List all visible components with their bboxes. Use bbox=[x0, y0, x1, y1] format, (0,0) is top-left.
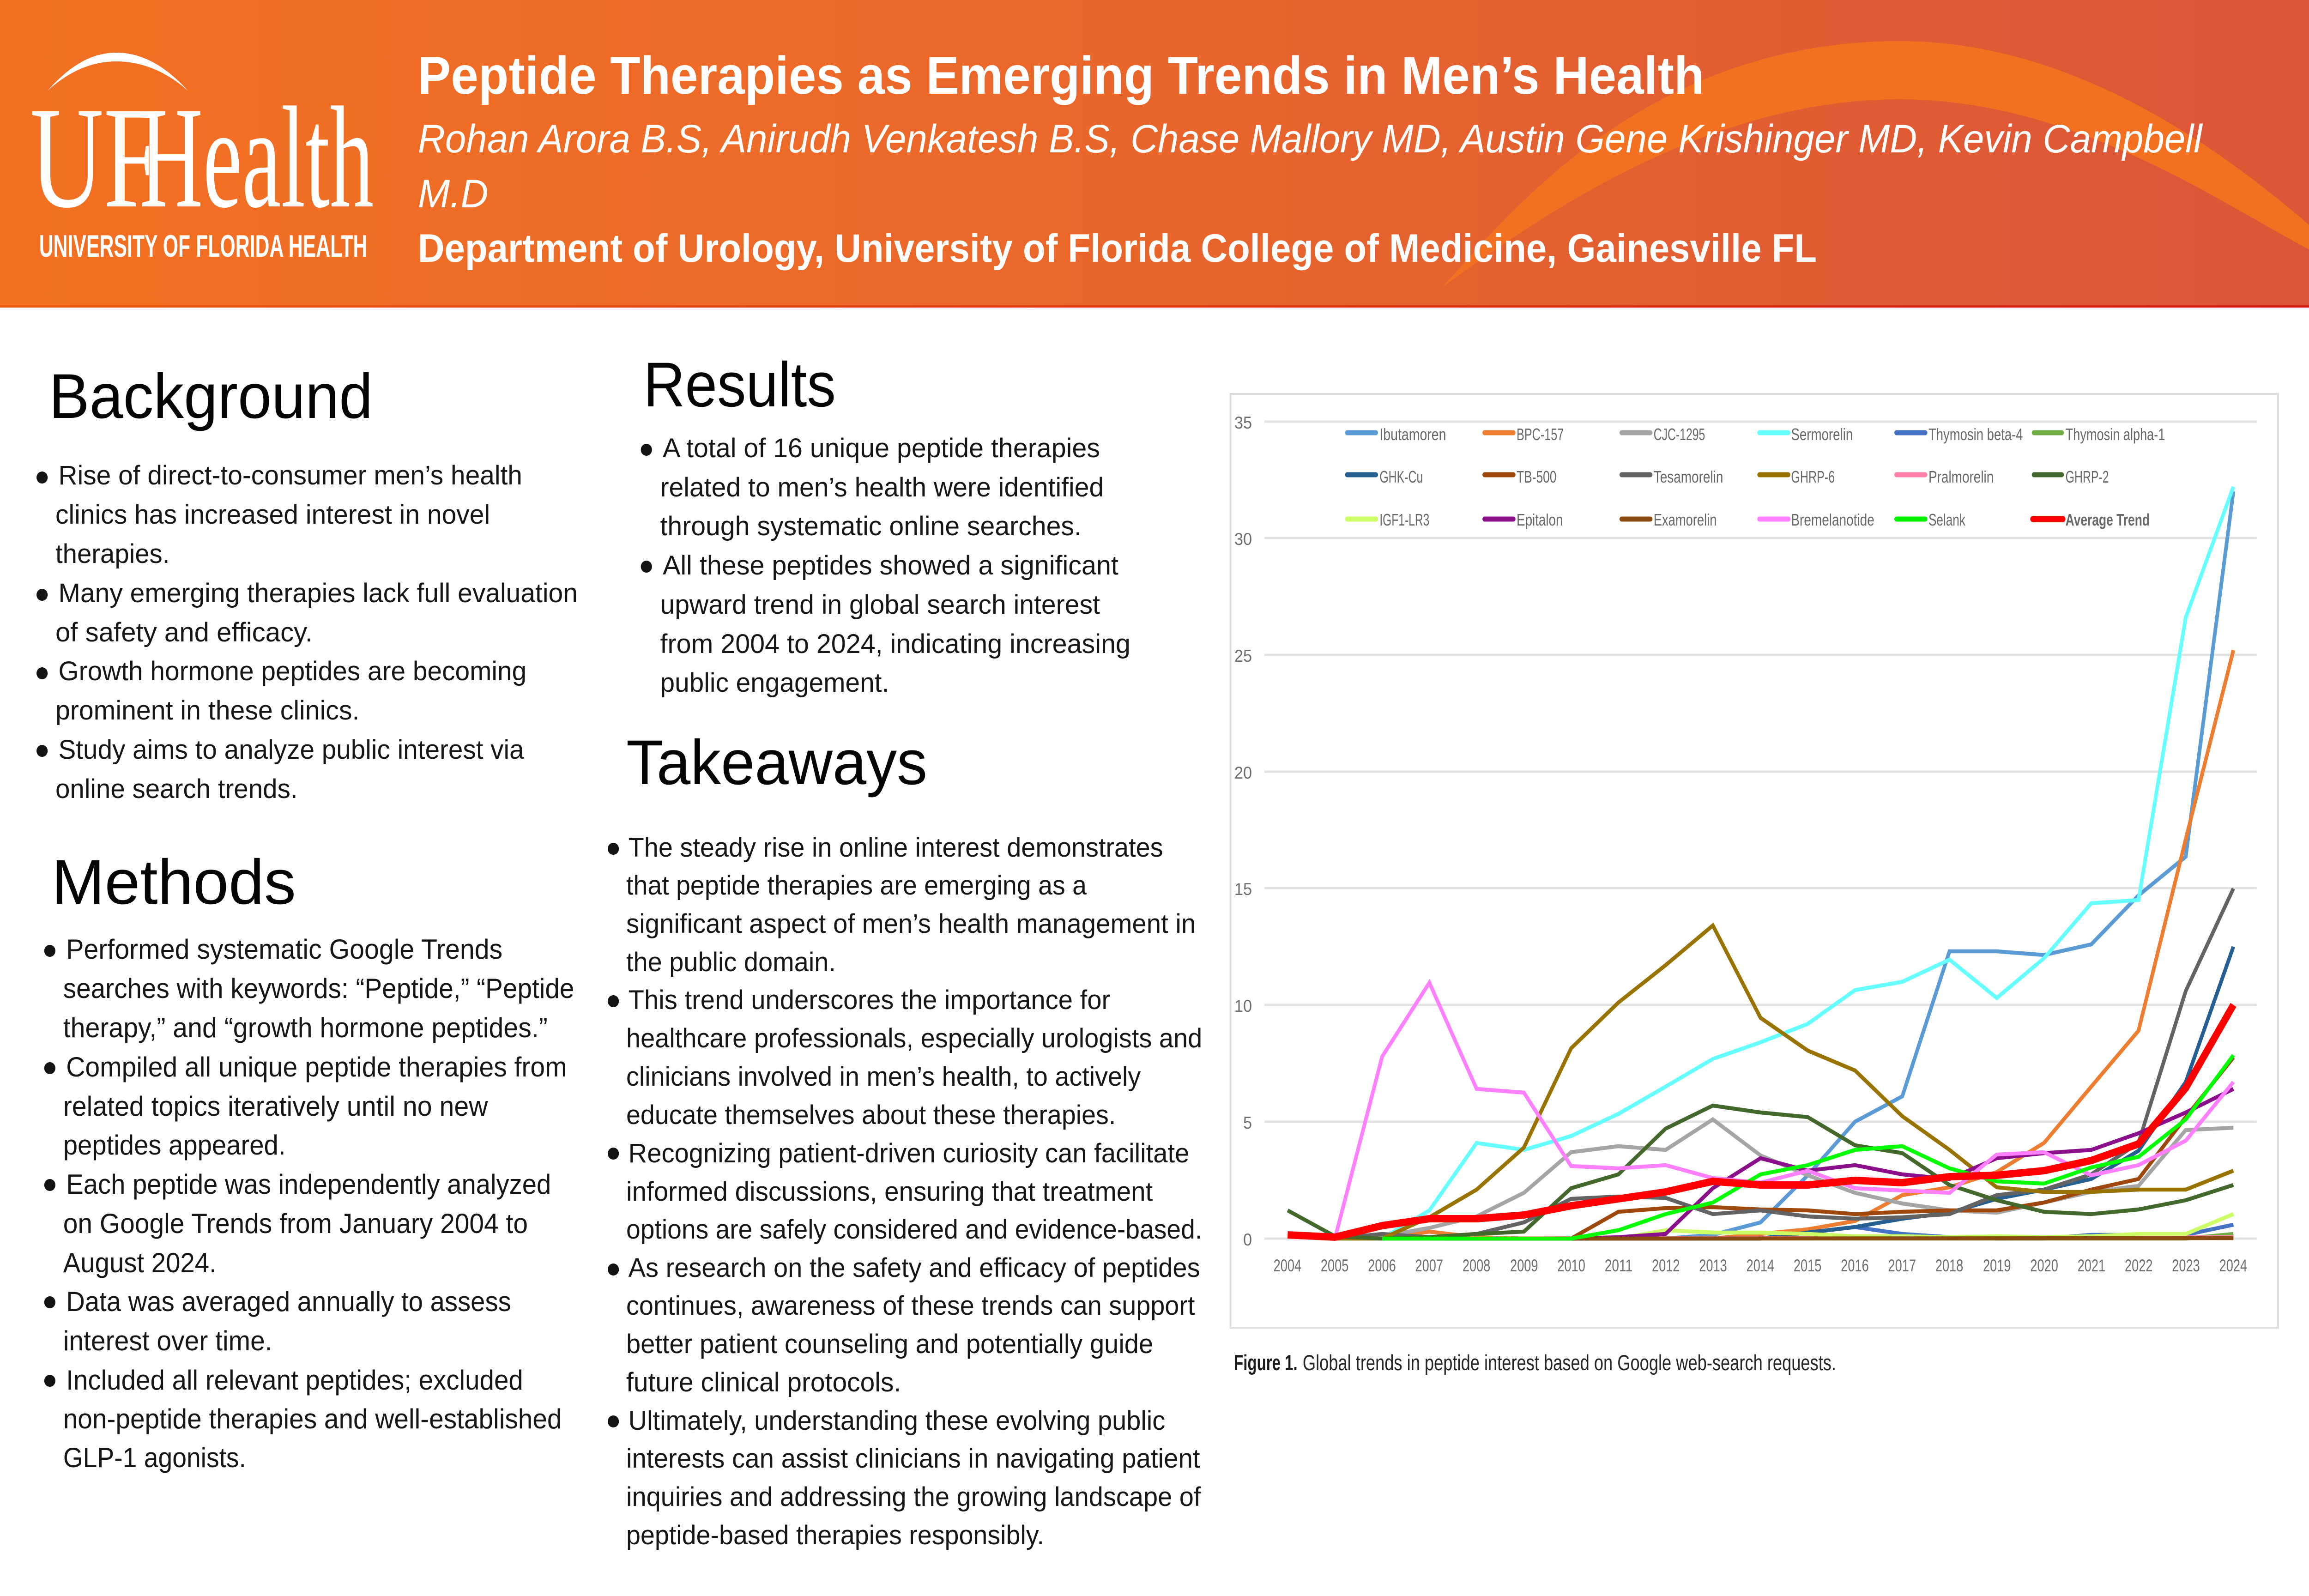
bullet list: background bbox=[36, 460, 578, 804]
logo: UF Health bbox=[30, 53, 374, 263]
bullet list: takeaways: Ultimately, understanding these evolving public bbox=[629, 1405, 1165, 1435]
bullet list: methods: Compiled all unique peptide therapies from bbox=[66, 1052, 567, 1082]
x axis year labels: 2005 bbox=[1321, 1256, 1348, 1275]
x axis year labels: 2020 bbox=[2030, 1256, 2058, 1275]
bullet list: results: public engagement. bbox=[660, 667, 889, 697]
bullet list: methods bbox=[44, 934, 574, 1473]
bullet list: takeaways: This trend underscores the importance for bbox=[629, 985, 1110, 1015]
logo: UF Health: UF bbox=[30, 77, 160, 238]
x axis year labels: 2022 bbox=[2125, 1256, 2152, 1275]
bullet list: takeaways: continues, awareness of these trends can support bbox=[626, 1290, 1195, 1320]
authors bbox=[418, 116, 2203, 216]
chart legend: Examorelin bbox=[1654, 511, 1717, 529]
x axis year labels: 2011 bbox=[1605, 1256, 1632, 1275]
heading: background: Background bbox=[49, 361, 373, 432]
bullet list: takeaways: As research on the safety and efficacy of peptides bbox=[629, 1252, 1200, 1282]
chart legend: GHRP-6 bbox=[1791, 468, 1835, 486]
bullet list: methods: Each peptide was independently analyzed bbox=[66, 1169, 551, 1200]
y axis labels bbox=[1234, 413, 1252, 1249]
decorative swoosh arc bbox=[1442, 41, 2309, 288]
bullet list: takeaways: better patient counseling and potentially guide bbox=[626, 1329, 1153, 1359]
heading: takeaways: Takeaways bbox=[626, 727, 927, 798]
bullet list: background: Rise of direct-to-consumer men’s health bbox=[58, 460, 522, 490]
x axis year labels bbox=[1274, 1256, 2247, 1275]
x axis year labels: 2013 bbox=[1699, 1256, 1727, 1275]
series: Thymosin alpha-1 bbox=[1382, 1234, 2233, 1239]
chart legend: GHRP-2 bbox=[2066, 468, 2109, 486]
bullet list: takeaways: healthcare professionals, especially urologists and bbox=[626, 1023, 1202, 1053]
bullet list: results: from 2004 to 2024, indicating increasing bbox=[660, 629, 1130, 659]
bullet list: methods: therapy,” and “growth hormone peptides.” bbox=[63, 1013, 548, 1043]
series: Examorelin bbox=[1571, 1238, 2233, 1239]
x axis year labels: 2024 bbox=[2219, 1256, 2247, 1275]
chart legend: Thymosin alpha-1 bbox=[2066, 426, 2165, 444]
bullet list: results: upward trend in global search interest bbox=[660, 589, 1100, 619]
bullet list: takeaways: options are safely considered and evidence-based. bbox=[626, 1214, 1202, 1244]
series: GHRP-2 bbox=[1287, 1106, 2233, 1239]
panel: results bbox=[641, 350, 1130, 697]
series: Epitalon bbox=[1571, 1089, 2233, 1239]
chart legend: Selank bbox=[1928, 511, 1965, 529]
chart legend: TB-500 bbox=[1517, 468, 1557, 486]
bullet list: methods: Performed systematic Google Trends bbox=[66, 934, 502, 965]
authors: Rohan Arora B.S, Anirudh Venkatesh B.S, Chase Mallory MD, Austin Gene Krishinger MD, Kevin Campbell bbox=[418, 116, 2203, 161]
panel: background bbox=[36, 361, 578, 804]
chart legend: Average Trend bbox=[2066, 511, 2150, 529]
chart legend: IGF1-LR3 bbox=[1379, 511, 1429, 529]
bullet list: background: Growth hormone peptides are becoming bbox=[58, 656, 526, 686]
data lines: peptide search interest by year bbox=[1287, 487, 2233, 1239]
series: GHRP-6 bbox=[1335, 925, 2233, 1239]
y axis labels: 10 bbox=[1234, 997, 1252, 1016]
y axis labels: 0 bbox=[1243, 1230, 1252, 1249]
bullet list: methods: related topics iteratively until no new bbox=[63, 1091, 488, 1122]
figure caption: Figure 1. bbox=[1234, 1351, 1298, 1375]
chart legend: GHK-Cu bbox=[1379, 468, 1423, 486]
series: Sermorelin bbox=[1335, 487, 2233, 1239]
panel: header banner bbox=[0, 0, 2309, 308]
y axis labels: 25 bbox=[1234, 647, 1252, 665]
x axis year labels: 2009 bbox=[1510, 1256, 1538, 1275]
x axis year labels: 2004 bbox=[1274, 1256, 1301, 1275]
bullet list: methods: August 2024. bbox=[63, 1248, 217, 1278]
bullet list: background: online search trends. bbox=[55, 774, 298, 804]
bullet list: background: of safety and efficacy. bbox=[55, 617, 313, 647]
chart legend: Epitalon bbox=[1517, 511, 1563, 529]
panel: figure 1 line chart bbox=[1231, 394, 2278, 1328]
bullet list: background: Many emerging therapies lack full evaluation bbox=[58, 578, 578, 608]
panel: methods bbox=[44, 847, 574, 1473]
bullet list: methods: peptides appeared. bbox=[63, 1130, 285, 1161]
bullet list: takeaways: future clinical protocols. bbox=[626, 1367, 901, 1397]
heading: results: Results bbox=[643, 350, 836, 420]
bullet list: methods: searches with keywords: “Peptide,” “Peptide bbox=[63, 973, 574, 1004]
bullet list: methods: Data was averaged annually to assess bbox=[66, 1287, 511, 1317]
bullet list: background: Study aims to analyze public interest via bbox=[58, 734, 525, 764]
bullet list: methods: interest over time. bbox=[63, 1326, 272, 1356]
series: Average Trend bbox=[1287, 1005, 2233, 1237]
x axis year labels: 2012 bbox=[1652, 1256, 1680, 1275]
panel: takeaways bbox=[608, 727, 1202, 1550]
series: Tesamorelin bbox=[1335, 889, 2233, 1239]
bullet list: results bbox=[641, 433, 1130, 697]
chart legend: Ibutamoren bbox=[1379, 426, 1446, 444]
bullet list: takeaways: Recognizing patient-driven curiosity can facilitate bbox=[629, 1138, 1189, 1168]
series: TB-500 bbox=[1477, 1058, 2233, 1239]
bullet list: takeaways bbox=[608, 832, 1202, 1550]
x axis year labels: 2016 bbox=[1841, 1256, 1869, 1275]
x axis year labels: 2014 bbox=[1747, 1256, 1774, 1275]
x axis year labels: 2019 bbox=[1983, 1256, 2011, 1275]
series: Thymosin beta-4 bbox=[1382, 1225, 2233, 1239]
y axis labels: 35 bbox=[1234, 413, 1252, 432]
bullet list: background: therapies. bbox=[55, 538, 169, 568]
bullet list: takeaways: inquiries and addressing the growing landscape of bbox=[626, 1481, 1201, 1511]
bullet list: methods: GLP-1 agonists. bbox=[63, 1443, 246, 1473]
bullet list: takeaways: informed discussions, ensuring that treatment bbox=[626, 1176, 1153, 1206]
chart legend: Tesamorelin bbox=[1654, 468, 1723, 486]
bullet list: methods: Included all relevant peptides; excluded bbox=[66, 1365, 523, 1396]
bullet list: takeaways: The steady rise in online interest demonstrates bbox=[629, 832, 1163, 862]
chart legend: Thymosin beta-4 bbox=[1928, 426, 2023, 444]
authors: M.D bbox=[418, 171, 488, 216]
bullet list: takeaways: that peptide therapies are emerging as a bbox=[626, 870, 1087, 900]
logo: UF Health: UNIVERSITY OF FLORIDA HEALTH bbox=[39, 229, 367, 263]
chart legend: Sermorelin bbox=[1791, 426, 1853, 444]
bullet list: takeaways: educate themselves about these therapies. bbox=[626, 1100, 1116, 1130]
series: BPC-157 bbox=[1382, 650, 2233, 1239]
bullet list: takeaways: peptide-based therapies responsibly. bbox=[626, 1520, 1044, 1550]
series: IGF1-LR3 bbox=[1618, 1214, 2233, 1239]
bullet list: takeaways: the public domain. bbox=[626, 947, 836, 977]
bullet list: methods: on Google Trends from January 2004 to bbox=[63, 1209, 528, 1239]
chart legend: CJC-1295 bbox=[1654, 426, 1705, 444]
figure caption: Global trends in peptide interest based on Google web-search requests. bbox=[1303, 1351, 1836, 1375]
x axis year labels: 2017 bbox=[1888, 1256, 1916, 1275]
bullet list: results: All these peptides showed a significant bbox=[663, 550, 1118, 580]
series: Selank bbox=[1382, 1055, 2233, 1239]
chart legend bbox=[1348, 426, 2165, 529]
bullet list: takeaways: significant aspect of men’s health management in bbox=[626, 908, 1196, 938]
series: GHK-Cu bbox=[1429, 947, 2233, 1239]
bullet list: results: A total of 16 unique peptide therapies bbox=[663, 433, 1100, 463]
bullet list: methods: non-peptide therapies and well-established bbox=[63, 1404, 562, 1434]
bullet list: results: related to men’s health were identified bbox=[660, 472, 1104, 502]
heading: methods: Methods bbox=[52, 847, 296, 918]
bullet list: takeaways: interests can assist clinicians in navigating patient bbox=[626, 1443, 1200, 1473]
bullet list: background: prominent in these clinics. bbox=[55, 695, 359, 725]
chart legend: Bremelanotide bbox=[1791, 511, 1874, 529]
series: Pralmorelin bbox=[1382, 1237, 2233, 1239]
series: CJC-1295 bbox=[1335, 1119, 2233, 1239]
chart legend: Pralmorelin bbox=[1928, 468, 1994, 486]
x axis year labels: 2007 bbox=[1415, 1256, 1443, 1275]
y axis labels: 15 bbox=[1234, 880, 1252, 899]
series: Bremelanotide bbox=[1335, 983, 2233, 1239]
x axis year labels: 2010 bbox=[1557, 1256, 1585, 1275]
series: Ibutamoren bbox=[1666, 491, 2233, 1239]
logo: UF Health: Health bbox=[139, 77, 374, 238]
x axis year labels: 2008 bbox=[1463, 1256, 1490, 1275]
bullet list: takeaways: clinicians involved in men’s health, to actively bbox=[626, 1061, 1141, 1091]
bullet list: background: clinics has increased interest in novel bbox=[55, 499, 490, 529]
x axis year labels: 2006 bbox=[1368, 1256, 1396, 1275]
x axis year labels: 2023 bbox=[2172, 1256, 2200, 1275]
department affiliation: Department of Urology, University of Florida College of Medicine, Gainesville FL bbox=[418, 226, 1817, 271]
chart legend: BPC-157 bbox=[1517, 426, 1564, 444]
x axis year labels: 2015 bbox=[1794, 1256, 1821, 1275]
x axis year labels: 2021 bbox=[2078, 1256, 2105, 1275]
x axis year labels: 2018 bbox=[1935, 1256, 1963, 1275]
bullet list: results: through systematic online searches. bbox=[660, 511, 1082, 541]
title: Peptide Therapies as Emerging Trends in Men’s Health bbox=[418, 45, 1704, 105]
y axis labels: 5 bbox=[1243, 1113, 1252, 1132]
y axis labels: 30 bbox=[1234, 530, 1252, 549]
y axis labels: 20 bbox=[1234, 763, 1252, 782]
